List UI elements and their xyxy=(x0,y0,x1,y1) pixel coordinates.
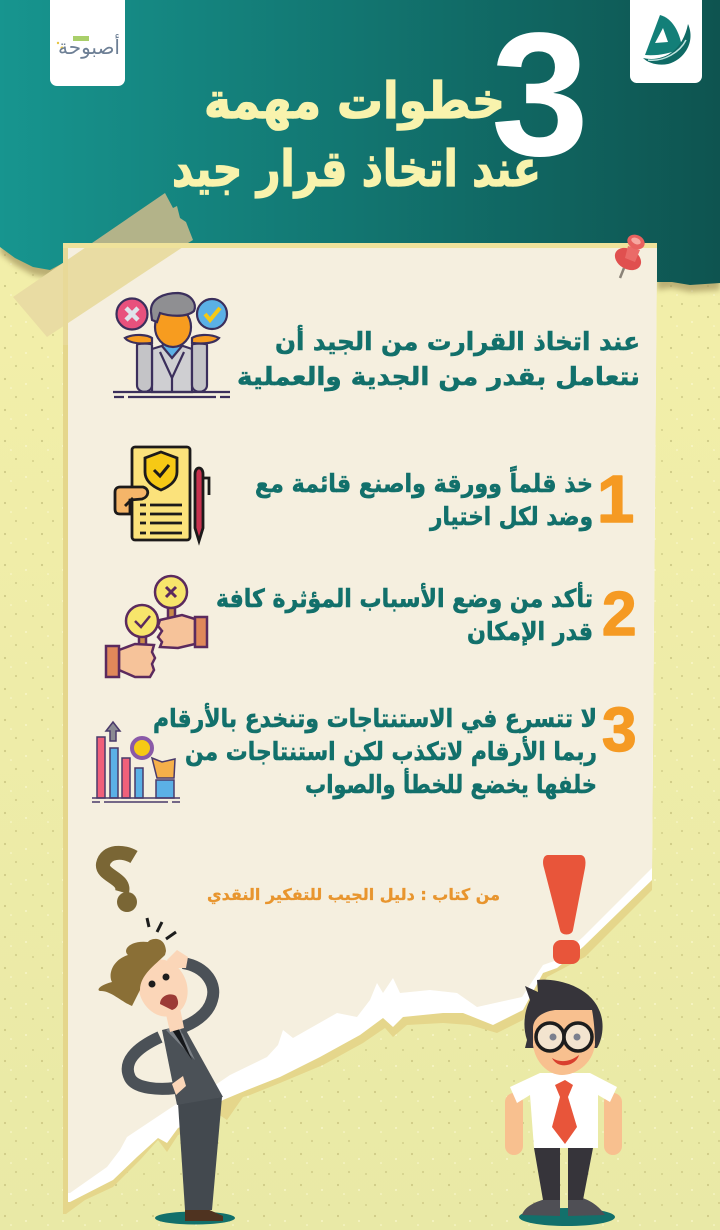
title: خطوات مهمة xyxy=(204,72,505,131)
pushpin icon xyxy=(611,232,647,278)
logo: left card: أصبوحة xyxy=(58,34,120,59)
icon: exclamation mark xyxy=(543,855,585,964)
header band xyxy=(0,0,720,285)
figure: confused man xyxy=(98,939,235,1224)
panel: paper xyxy=(68,248,657,1193)
text block: item 1 xyxy=(255,466,593,532)
item 3 number: 3 xyxy=(602,696,636,765)
icon: question mark xyxy=(103,853,137,912)
figure: man with glasses xyxy=(505,980,622,1226)
icon: man weighing choices xyxy=(113,293,230,397)
item 1 number: 1 xyxy=(597,462,634,537)
text block: item 3: خلفها يخضع للخطأ والصواب xyxy=(305,768,597,800)
text block: intro: عند اتخاذ القرارت من الجيد أن xyxy=(275,325,640,357)
title xyxy=(172,72,541,199)
text block: item 2 xyxy=(216,582,593,646)
icon: bar chart with magnifier xyxy=(92,722,180,802)
icon: hands holding check and cross signs xyxy=(106,576,207,677)
text block: item 1: خذ قلماً وورقة واصنع قائمة مع xyxy=(255,466,593,499)
text block: item 3: ربما الأرقام لاتكذب لكن استنتاجات من xyxy=(185,736,597,767)
logo: left card xyxy=(50,0,125,86)
confusion ticks xyxy=(147,918,176,939)
text block: item 2: تأكد من وضع الأسباب المؤثرة كافة xyxy=(216,582,593,614)
text block: item 1: وضد لكل اختيار xyxy=(428,502,593,532)
panel: paper tan tear edge and left strip xyxy=(63,243,657,1214)
logo: right card xyxy=(630,0,702,83)
text block: intro xyxy=(237,325,640,392)
panel: white torn edge xyxy=(68,248,657,1202)
header shadow xyxy=(0,200,720,292)
credit: من كتاب : دليل الجيب للتفكير النقدي xyxy=(207,885,500,905)
tape xyxy=(13,193,657,345)
title: عند اتخاذ قرار جيد xyxy=(172,140,541,199)
big number 3: 3 xyxy=(491,0,589,193)
text block: item 2: قدر الإمكان xyxy=(467,617,593,646)
text block: item 3: لا تتسرع في الاستنتاجات وتنخدع بالأرقام xyxy=(153,703,597,734)
text block: intro: نتعامل بقدر من الجدية والعملية xyxy=(237,362,640,392)
icon: document with shield xyxy=(115,447,209,541)
item 2 number: 2 xyxy=(602,580,636,649)
text block: item 3 xyxy=(153,703,597,800)
